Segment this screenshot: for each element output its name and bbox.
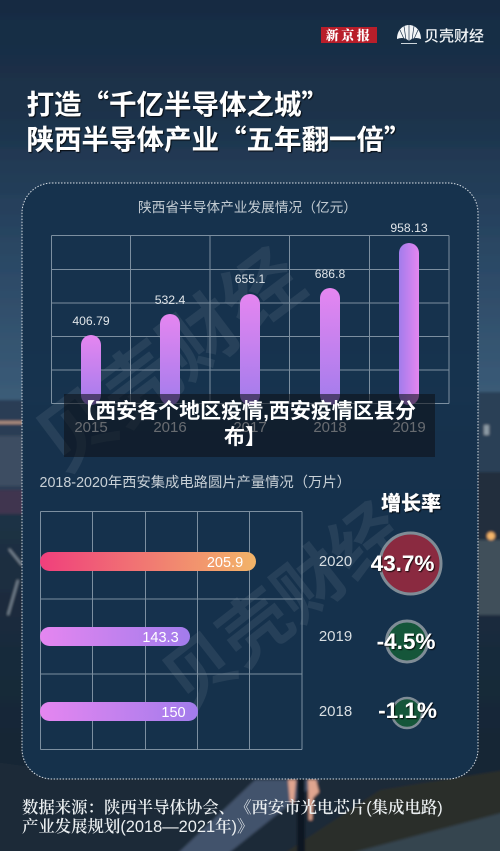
bar 2019 bbox=[40, 627, 190, 646]
bar 2018: 150 bbox=[161, 705, 186, 721]
year labels: 2018 bbox=[319, 703, 352, 720]
bar 2019: 143.3 bbox=[142, 630, 179, 646]
title bbox=[26, 82, 412, 157]
year labels: 2019 bbox=[392, 419, 426, 436]
bar 2015 bbox=[81, 335, 101, 405]
year labels: 2016 bbox=[153, 419, 187, 436]
bar 2017 bbox=[240, 294, 260, 405]
value labels: 958.13 bbox=[390, 221, 428, 235]
growth rate heading: 增长率 bbox=[381, 487, 441, 516]
logo: 贝壳财经: 贝壳财经 bbox=[424, 25, 484, 46]
logo: 贝壳财经 bbox=[397, 25, 484, 46]
growth circle 2020: 43.7% bbox=[371, 551, 434, 576]
watermark upper: 贝壳财经 bbox=[10, 219, 323, 493]
bar chart: wafer output bbox=[40, 512, 352, 750]
bar 2019 bbox=[399, 243, 419, 405]
growth circle 2018: -1.1% bbox=[378, 698, 437, 723]
year labels bbox=[319, 553, 352, 720]
source note: 数据来源：陕西半导体协会、《西安市光电芯片(集成电路) bbox=[22, 798, 443, 817]
data panel bbox=[10, 183, 478, 779]
chart title: wafer output: 2018-2020年西安集成电路圆片产量情况（万片） bbox=[40, 474, 351, 491]
title: 打造“千亿半导体之城” bbox=[26, 82, 329, 122]
overlay banner headline bbox=[64, 394, 435, 457]
year labels: 2019 bbox=[319, 628, 352, 645]
bar chart: Shaanxi semiconductor output bbox=[52, 221, 449, 436]
value labels: 406.79 bbox=[72, 314, 110, 328]
growth circle 2020 bbox=[371, 533, 441, 594]
year labels bbox=[74, 419, 426, 436]
chart title: output value: 陕西省半导体产业发展情况（亿元） bbox=[138, 200, 357, 215]
overlay banner headline: 【西安各个地区疫情,西安疫情区县分 bbox=[74, 400, 416, 423]
year labels: 2018 bbox=[313, 419, 347, 436]
growth circle 2019 bbox=[377, 621, 435, 662]
source note: 产业发展规划(2018—2021年)》 bbox=[22, 817, 253, 836]
value labels: 655.1 bbox=[235, 272, 265, 286]
bar 2020: 205.9 bbox=[207, 555, 243, 571]
source note bbox=[22, 798, 443, 836]
watermark lower: 贝壳财经 bbox=[138, 476, 421, 728]
logo: 新京报: 新京报 bbox=[326, 25, 372, 44]
bar 2016 bbox=[160, 314, 180, 405]
title: 陕西半导体产业“五年翻一倍” bbox=[26, 117, 412, 157]
bar 2020 bbox=[40, 552, 256, 571]
year labels: 2020 bbox=[319, 553, 352, 570]
value labels: 686.8 bbox=[315, 267, 345, 281]
growth circle 2019: -4.5% bbox=[377, 629, 435, 654]
value labels: 532.4 bbox=[155, 293, 185, 307]
year labels: 2017 bbox=[233, 419, 267, 436]
bar 2018 bbox=[320, 288, 340, 405]
overlay banner headline: 布】 bbox=[224, 426, 266, 449]
value labels bbox=[72, 221, 428, 328]
bar 2018 bbox=[40, 702, 198, 721]
year labels: 2015 bbox=[74, 419, 108, 436]
